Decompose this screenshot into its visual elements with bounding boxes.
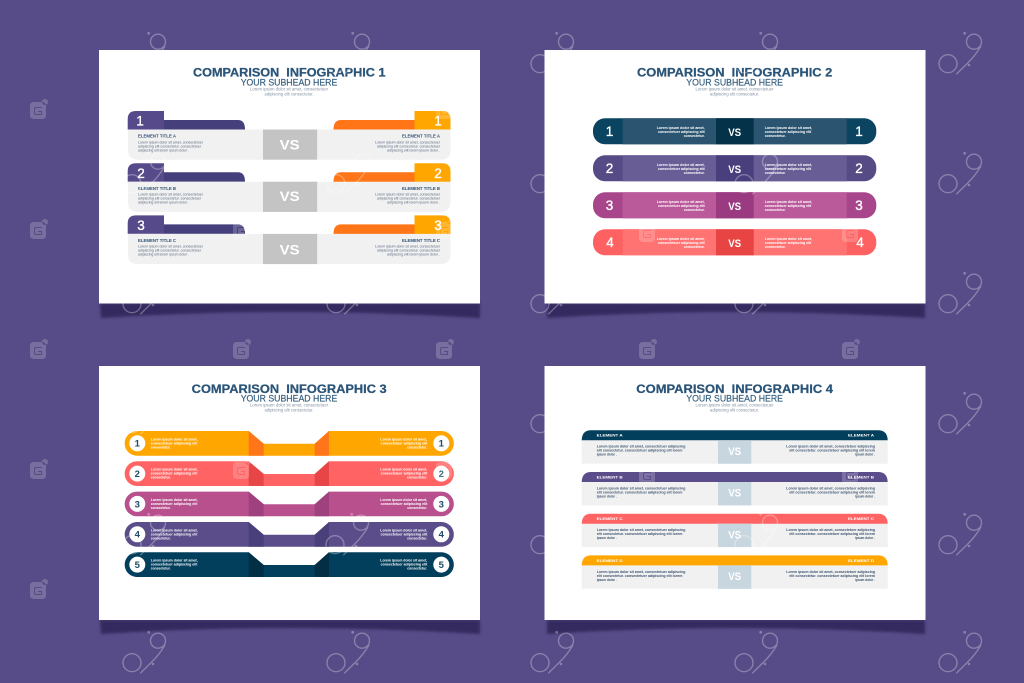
ribbon row 1: Lorem ipsum dolor sit amet,: [380, 436, 427, 441]
pill row 3: consectetuer adipiscing elit: [658, 203, 705, 208]
table row D: Lorem ipsum dolor sit amet, consectetuer adipiscing: [597, 569, 686, 574]
row 2 comparison: [128, 163, 450, 212]
pill row 4: 4: [606, 235, 614, 250]
title 4: COMPARISON INFOGRAPHIC 4: [636, 382, 833, 396]
ribbon row 5: consectetur.: [151, 566, 171, 571]
ribbon row 3: [125, 492, 454, 516]
table row A: ELEMENT A: [848, 433, 874, 438]
table row C: Lorem ipsum dolor sit amet, consectetuer adipiscing: [597, 527, 686, 532]
ribbon row 5: consectetur.: [407, 566, 427, 571]
ribbon row 3: Lorem ipsum dolor sit amet,: [380, 497, 427, 502]
panel: comparison infographic 1: [99, 50, 480, 304]
ribbon row 3: consectetuer adipiscing elit: [151, 501, 198, 506]
intro text 4: Lorem ipsum dolor sit amet, consectetuer: [696, 402, 774, 408]
ribbon row 5: Lorem ipsum dolor sit amet,: [380, 558, 427, 563]
row 2 comparison: ELEMENT TITLE B: [402, 186, 440, 191]
pill row 4: consectetuer adipiscing elit: [765, 240, 812, 245]
table row D: elit consectetur. consectetuer adipiscing elit lorem: [789, 573, 875, 578]
ribbon row 3: Lorem ipsum dolor sit amet,: [151, 497, 198, 502]
subhead 4: YOUR SUBHEAD HERE: [686, 394, 783, 405]
row 1 comparison: adipiscing elit consectetur. consectetuer: [377, 143, 441, 148]
row 1 comparison: adipiscing elit lorem ipsum dolor .: [138, 147, 189, 152]
row 1 comparison: 1: [434, 114, 442, 129]
ribbon row 1: Lorem ipsum dolor sit amet,: [151, 436, 198, 441]
title 2: COMPARISON INFOGRAPHIC 2: [637, 66, 833, 80]
row 2 comparison: 2: [434, 166, 442, 181]
intro text 4: adipiscing elit consectetur.: [710, 408, 759, 412]
table row A: ELEMENT A: [597, 433, 623, 438]
table row B: Lorem ipsum dolor sit amet, consectetuer adipiscing: [786, 485, 875, 490]
pill row 1: 1: [606, 124, 613, 139]
row 3 comparison: adipiscing elit lorem ipsum dolor .: [138, 252, 189, 257]
ribbon row 3: consectetur.: [407, 505, 427, 510]
row 2 comparison: VS: [280, 188, 300, 204]
ribbon row 4: Lorem ipsum dolor sit amet,: [380, 527, 427, 532]
table row B: elit consectetur. consectetuer adipiscing elit lorem: [789, 489, 875, 494]
ribbon row 1: 1: [439, 439, 445, 450]
ribbon row 5: 5: [135, 560, 141, 571]
ribbon row 4: consectetuer adipiscing elit: [151, 531, 198, 536]
subhead 2: YOUR SUBHEAD HERE: [686, 77, 783, 88]
pill row 1: consectetur.: [765, 133, 786, 138]
table row B: Lorem ipsum dolor sit amet, consectetuer adipiscing: [597, 485, 686, 490]
row 3 comparison: adipiscing elit lorem ipsum dolor .: [387, 252, 440, 257]
title 3: COMPARISON INFOGRAPHIC 3: [192, 382, 387, 396]
row 3 comparison: Lorem ipsum dolor sit amet, consectetuer: [138, 244, 204, 249]
title 1: COMPARISON INFOGRAPHIC 1: [193, 66, 386, 80]
panel: comparison infographic 2: [544, 50, 926, 304]
ribbon row 2: [125, 461, 454, 486]
pill row 4: consectetur.: [765, 244, 786, 249]
pill row 2: Lorem ipsum dolor sit amet,: [657, 162, 705, 167]
intro text 1: [250, 86, 329, 96]
row 3 comparison: ELEMENT TITLE C: [138, 238, 176, 243]
table row C: ipsum dolor .: [855, 535, 875, 540]
pill row 2: Lorem ipsum dolor sit amet,: [765, 162, 812, 167]
intro text 2: [696, 86, 774, 96]
pill row 1: consectetuer adipiscing elit: [658, 129, 705, 134]
ribbon row 4: 4: [135, 530, 141, 541]
ribbon row 4: consectetuer adipiscing elit: [381, 531, 428, 536]
pill row 1: consectetuer adipiscing elit: [765, 129, 812, 134]
pill row 2: VS: [728, 164, 741, 176]
row 2 comparison: adipiscing elit consectetur. consectetuer: [138, 196, 202, 201]
pill row 3: VS: [728, 201, 741, 213]
row 2 comparison: 2: [137, 166, 145, 181]
ribbon row 1: consectetur.: [151, 444, 171, 449]
table row C: ELEMENT C: [597, 516, 623, 521]
row 1 comparison: ELEMENT TITLE A: [138, 134, 176, 139]
table row D: elit consectetur. consectetuer adipiscing elit lorem: [597, 573, 683, 578]
table row A: elit consectetur. consectetuer adipiscing elit lorem: [789, 448, 875, 453]
pill row 2: consectetur.: [684, 170, 705, 175]
ribbon row 2: Lorem ipsum dolor sit amet,: [151, 467, 198, 472]
table row D: [582, 555, 888, 589]
ribbon row 1: [125, 431, 454, 456]
ribbon row 1: consectetuer adipiscing elit: [381, 440, 428, 445]
table row B: VS: [728, 488, 741, 500]
ribbon row 4: 4: [439, 530, 445, 541]
row 3 comparison: VS: [280, 241, 300, 257]
ribbon row 5: Lorem ipsum dolor sit amet,: [151, 558, 198, 563]
table row D: ipsum dolor .: [855, 577, 875, 582]
pill row 1: [593, 118, 876, 144]
pill row 4: Lorem ipsum dolor sit amet,: [765, 236, 812, 241]
ribbon row 3: consectetuer adipiscing elit: [381, 501, 428, 506]
pill row 4: consectetur.: [684, 244, 705, 249]
table row C: [582, 514, 888, 547]
table row A: Lorem ipsum dolor sit amet, consectetuer adipiscing: [597, 444, 686, 449]
ribbon row 5: consectetuer adipiscing elit: [381, 562, 428, 567]
ribbon row 5: consectetuer adipiscing elit: [151, 562, 198, 567]
ribbon row 5: 5: [439, 560, 445, 571]
row 1 comparison: adipiscing elit lorem ipsum dolor .: [387, 147, 440, 152]
pill row 4: 4: [856, 235, 864, 250]
pill row 3: consectetuer adipiscing elit: [765, 203, 812, 208]
table row C: VS: [728, 529, 741, 541]
intro text 2: adipiscing elit consectetur.: [710, 92, 759, 96]
pill row 4: Lorem ipsum dolor sit amet,: [657, 236, 705, 241]
row 3 comparison: ELEMENT TITLE C: [402, 238, 440, 243]
row 1 comparison: Lorem ipsum dolor sit amet, consectetuer: [375, 139, 441, 144]
script logo watermarks: [123, 32, 982, 673]
pill row 1: Lorem ipsum dolor sit amet,: [657, 125, 705, 130]
panel: comparison infographic 3: [99, 366, 480, 620]
table row C: Lorem ipsum dolor sit amet, consectetuer adipiscing: [786, 527, 875, 532]
ribbon row 2: 2: [439, 469, 444, 480]
table row C: ipsum dolor .: [597, 535, 617, 540]
ribbon row 2: 2: [135, 469, 140, 480]
table row A: ipsum dolor .: [597, 452, 617, 457]
intro text 3: adipiscing elit consectetur.: [264, 408, 314, 412]
row 3 comparison: 3: [434, 218, 442, 233]
ribbon row 4: Lorem ipsum dolor sit amet,: [151, 527, 198, 532]
intro text 1: Lorem ipsum dolor sit amet, consectetuer: [250, 86, 329, 92]
row 1 comparison: VS: [280, 136, 300, 152]
table row A: VS: [728, 446, 741, 458]
pill row 3: consectetur.: [684, 207, 705, 212]
pill row 3: Lorem ipsum dolor sit amet,: [765, 199, 812, 204]
pill row 2: consectetur.: [765, 170, 786, 175]
table row B: elit consectetur. consectetuer adipiscing elit lorem: [597, 489, 683, 494]
panel shadows: [100, 303, 925, 634]
row 2 comparison: Lorem ipsum dolor sit amet, consectetuer: [138, 192, 204, 197]
pill row 1: consectetur.: [684, 133, 705, 138]
row 1 comparison: 1: [136, 114, 144, 129]
table row B: ELEMENT B: [597, 474, 623, 479]
ribbon row 2: Lorem ipsum dolor sit amet,: [380, 467, 427, 472]
table row C: elit consectetur. consectetuer adipiscing elit lorem: [789, 531, 875, 536]
row 2 comparison: Lorem ipsum dolor sit amet, consectetuer: [375, 192, 441, 197]
ribbon row 2: consectetur.: [407, 475, 427, 480]
square logo watermarks: [30, 99, 860, 599]
table row D: ELEMENT D: [848, 558, 874, 563]
row 3 comparison: 3: [137, 218, 145, 233]
row 2 comparison: adipiscing elit lorem ipsum dolor .: [387, 200, 440, 205]
pill row 2: 2: [606, 161, 613, 176]
ribbon row 2: consectetuer adipiscing elit: [381, 471, 428, 476]
table row B: [582, 472, 888, 505]
ribbon row 1: 1: [135, 439, 141, 450]
pill row 4: VS: [728, 238, 741, 250]
pill row 1: 1: [855, 124, 863, 139]
row 2 comparison: ELEMENT TITLE B: [138, 186, 176, 191]
ribbon row 4: [125, 522, 454, 547]
pill row 3: Lorem ipsum dolor sit amet,: [657, 199, 705, 204]
table row C: elit consectetur. consectetuer adipiscing elit lorem: [597, 531, 683, 536]
ribbon row 2: consectetur.: [151, 475, 171, 480]
ribbon row 5: [125, 552, 454, 577]
panel: comparison infographic 4: [544, 366, 926, 620]
ribbon row 4: consectetur.: [407, 535, 427, 540]
table row B: ELEMENT B: [848, 474, 874, 479]
table row D: ELEMENT D: [597, 558, 623, 563]
intro text 3: [250, 402, 329, 412]
ribbon row 4: consectetur.: [151, 535, 171, 540]
table row D: Lorem ipsum dolor sit amet, consectetuer adipiscing: [786, 569, 875, 574]
row 3 comparison: adipiscing elit consectetur. consectetuer: [138, 248, 202, 253]
pill row 3: consectetur.: [765, 207, 786, 212]
table row A: [582, 430, 888, 464]
table row C: ELEMENT C: [848, 516, 874, 521]
ribbon row 2: consectetuer adipiscing elit: [151, 471, 198, 476]
pill row 2: consectetuer adipiscing elit: [658, 166, 705, 171]
row 2 comparison: adipiscing elit consectetur. consectetuer: [377, 196, 441, 201]
intro text 4: [696, 402, 774, 412]
pill row 2: [593, 155, 876, 181]
row 1 comparison: Lorem ipsum dolor sit amet, consectetuer: [138, 139, 204, 144]
table row A: elit consectetur. consectetuer adipiscing elit lorem: [597, 448, 683, 453]
pill row 4: [593, 229, 876, 255]
row 3 comparison: Lorem ipsum dolor sit amet, consectetuer: [375, 244, 441, 249]
table row A: ipsum dolor .: [855, 452, 875, 457]
row 3 comparison: adipiscing elit consectetur. consectetuer: [377, 248, 441, 253]
intro text 1: adipiscing elit consectetur.: [264, 92, 314, 96]
pill row 1: Lorem ipsum dolor sit amet,: [765, 125, 812, 130]
subhead 3: YOUR SUBHEAD HERE: [241, 394, 337, 405]
pill row 2: consectetuer adipiscing elit: [765, 166, 812, 171]
table row B: ipsum dolor .: [597, 493, 617, 498]
intro text 3: Lorem ipsum dolor sit amet, consectetuer: [250, 402, 329, 408]
subhead 1: YOUR SUBHEAD HERE: [241, 77, 337, 88]
pill row 3: 3: [606, 198, 613, 213]
table row B: ipsum dolor .: [855, 493, 875, 498]
ribbon row 1: consectetuer adipiscing elit: [151, 440, 198, 445]
table row A: Lorem ipsum dolor sit amet, consectetuer adipiscing: [786, 444, 875, 449]
row 2 comparison: adipiscing elit lorem ipsum dolor .: [138, 200, 189, 205]
row 3 comparison: [128, 215, 450, 264]
table row D: VS: [728, 571, 741, 583]
ribbon row 3: 3: [439, 499, 444, 510]
intro text 2: Lorem ipsum dolor sit amet, consectetuer: [696, 86, 774, 92]
ribbon row 1: consectetur.: [407, 444, 427, 449]
pill row 1: VS: [728, 127, 741, 139]
pill row 3: [593, 192, 876, 218]
ribbon row 3: consectetur.: [151, 505, 171, 510]
pill row 2: 2: [855, 161, 863, 176]
row 1 comparison: [128, 111, 450, 160]
row 1 comparison: adipiscing elit consectetur. consectetuer: [138, 143, 202, 148]
pill row 3: 3: [855, 198, 863, 213]
row 1 comparison: ELEMENT TITLE A: [402, 134, 440, 139]
pill row 4: consectetuer adipiscing elit: [658, 240, 705, 245]
table row D: ipsum dolor .: [597, 577, 617, 582]
ribbon row 3: 3: [135, 499, 140, 510]
